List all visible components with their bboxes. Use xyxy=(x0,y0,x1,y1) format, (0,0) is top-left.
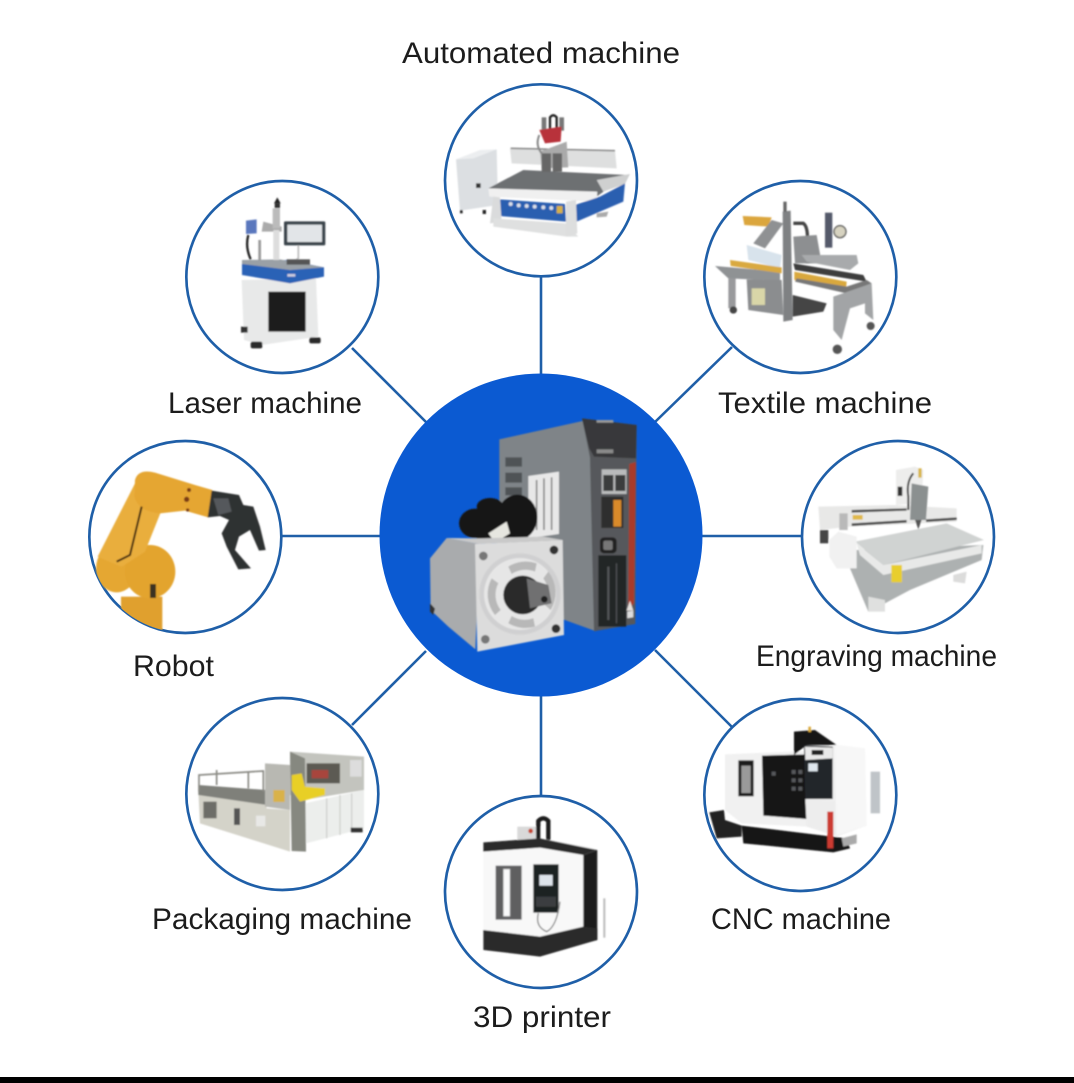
icon: CNC machining centre xyxy=(709,727,880,852)
label: Engraving machine: Engraving machine xyxy=(756,640,997,673)
circle outline xyxy=(89,441,281,633)
bottom black bar xyxy=(0,1077,1074,1083)
icon: engraving machine xyxy=(818,467,984,612)
circle outline xyxy=(186,698,378,890)
icon: router machine xyxy=(456,115,630,237)
icon: robot arm xyxy=(96,471,266,633)
label: Laser machine: Laser machine xyxy=(168,387,362,420)
panel: 3D printer xyxy=(445,796,637,988)
icon: servo drive and motor xyxy=(430,418,637,652)
label: Robot: Robot xyxy=(133,650,215,683)
circle outline xyxy=(704,181,896,373)
panel: packaging machine xyxy=(186,698,378,890)
label: Textile machine: Textile machine xyxy=(718,387,932,420)
icon: carton sealing machine xyxy=(715,202,875,354)
circle outline xyxy=(445,796,637,988)
icon: packaging machine xyxy=(198,752,364,852)
circle outline xyxy=(445,84,637,276)
circle outline xyxy=(704,699,896,891)
panel: textile machine xyxy=(704,181,896,373)
panel: CNC machine xyxy=(704,699,896,891)
panel: central servo motor and drive xyxy=(380,374,702,696)
panel: automated machine xyxy=(445,84,637,276)
label: Automated machine: Automated machine xyxy=(402,37,680,70)
label: Packaging machine: Packaging machine xyxy=(152,903,412,936)
icon: vertical machine xyxy=(483,818,604,957)
label: CNC machine: CNC machine xyxy=(711,903,891,936)
icon: laser marking machine xyxy=(241,197,325,348)
panel: engraving machine xyxy=(802,441,994,633)
panel: laser machine xyxy=(186,181,378,373)
label: 3D printer: 3D printer xyxy=(473,1001,611,1034)
panel: robot xyxy=(89,441,281,633)
central blue circle xyxy=(380,374,702,696)
circle outline xyxy=(802,441,994,633)
circle outline xyxy=(186,181,378,373)
connector lines xyxy=(282,277,802,796)
